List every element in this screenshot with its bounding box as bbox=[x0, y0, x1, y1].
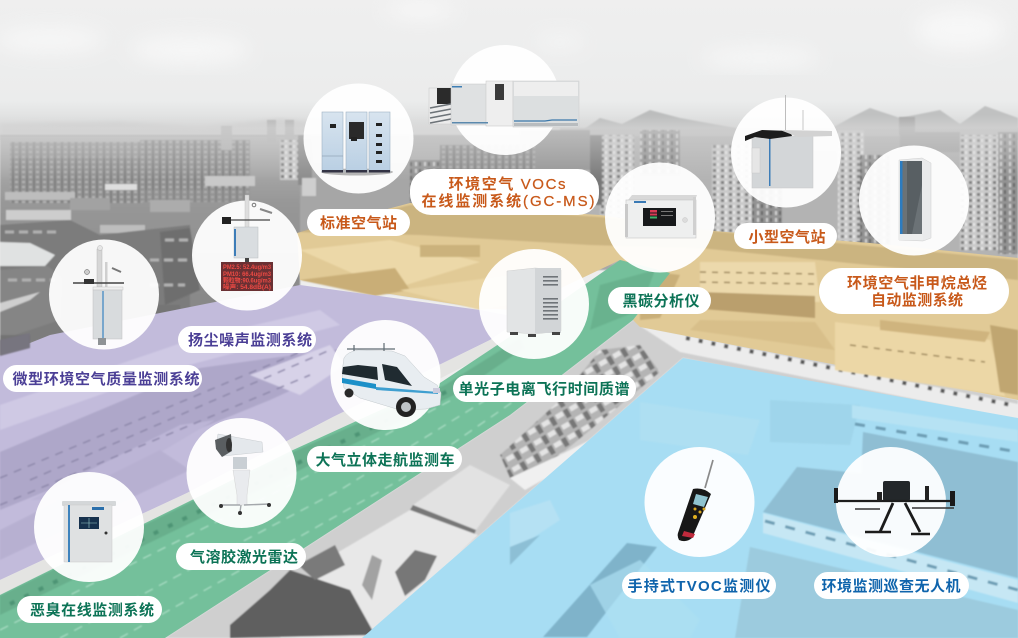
background: sky with clouds bbox=[0, 0, 1018, 140]
product: dust and noise monitor bbox=[192, 195, 302, 310]
label: single photon TOF mass spec bbox=[453, 375, 636, 402]
icon: dust monitor with display: 颗粒物:90.6ug/m3 bbox=[223, 276, 272, 284]
icon: handheld detector bbox=[678, 460, 713, 541]
label: atmospheric mobile monitoring vehicle: 大气立体走航监测车 bbox=[316, 451, 454, 469]
label: handheld TVOC monitor: 手持式TVOC监测仪 bbox=[628, 578, 770, 595]
label: micro air quality monitor: 微型环境空气质量监测系统 bbox=[12, 370, 200, 388]
right side tower rows bbox=[410, 135, 1018, 265]
product: black carbon analyzer bbox=[605, 162, 715, 272]
background: city skyline and urban blocks bbox=[0, 117, 1018, 356]
product: aerosol lidar bbox=[186, 418, 296, 528]
label: odor online monitor: 恶臭在线监测系统 bbox=[30, 601, 154, 619]
icon: small station cabinet bbox=[745, 95, 832, 188]
product: VOCs GC-MS system bbox=[429, 45, 579, 155]
label: standard air station bbox=[307, 209, 410, 236]
label: dust and noise monitor bbox=[178, 326, 316, 353]
atmospheric haze over the far skyline bbox=[0, 115, 1018, 180]
icon: GC-MS instruments bbox=[429, 81, 579, 127]
product: micro air quality monitor bbox=[49, 240, 159, 350]
label: black carbon analyzer: 黑碳分析仪 bbox=[622, 292, 700, 310]
product: standard air station bbox=[304, 84, 414, 194]
label: aerosol lidar bbox=[176, 543, 306, 570]
label: dust and noise monitor: 扬尘噪声监测系统 bbox=[188, 331, 312, 349]
icon: micro monitor station bbox=[73, 246, 124, 345]
label: VOCs GC-MS system bbox=[410, 169, 599, 215]
icon: dust monitor with display: 噪声: 54.8dB(A) bbox=[223, 283, 271, 291]
product: non-methane hydrocarbon monitor bbox=[859, 146, 969, 256]
icon: drone bbox=[834, 481, 955, 534]
label: VOCs GC-MS system: 在线监测系统(GC-MS) bbox=[422, 192, 594, 210]
label: standard air station: 标准空气站 bbox=[320, 214, 397, 232]
product: small air station bbox=[731, 95, 841, 208]
label: non-methane hydrocarbon monitor: 自动监测系统 bbox=[871, 291, 963, 309]
zone: lilac road district bbox=[0, 285, 522, 580]
icon: lidar on tripod bbox=[215, 434, 271, 515]
zone: tan industrial district bbox=[297, 203, 1018, 400]
label: handheld TVOC monitor bbox=[622, 572, 776, 599]
icon: wall-mounted odor cabinet bbox=[62, 501, 116, 562]
icon: dust monitor with display bbox=[221, 195, 273, 291]
icon: tall analyzer cabinet bbox=[899, 158, 931, 241]
label: patrol drone bbox=[814, 572, 969, 599]
label: atmospheric mobile monitoring vehicle bbox=[307, 446, 462, 472]
label: micro air quality monitor bbox=[3, 365, 202, 392]
product: odor online monitor bbox=[34, 472, 144, 582]
icon: monitoring van bbox=[342, 343, 441, 417]
icon: dust monitor with display: PM2.5: 52.4ug/m3 bbox=[223, 265, 272, 271]
label: aerosol lidar: 气溶胶激光雷达 bbox=[190, 548, 298, 566]
zone: blue factory district bbox=[362, 358, 1018, 638]
product: handheld TVOC monitor bbox=[644, 447, 754, 557]
icon: three cabinets bbox=[321, 112, 393, 176]
product: patrol drone bbox=[834, 447, 955, 557]
label: small air station bbox=[734, 223, 837, 249]
label: single photon TOF mass spec: 单光子电离飞行时间质谱 bbox=[458, 380, 630, 398]
label: patrol drone: 环境监测巡查无人机 bbox=[822, 577, 960, 595]
label: non-methane hydrocarbon monitor: 环境空气非甲烷总烃 bbox=[847, 274, 987, 292]
label: VOCs GC-MS system: 环境空气 VOCs bbox=[448, 175, 566, 193]
zone: gray ground between districts bbox=[165, 280, 1018, 638]
icon: dust monitor with display: PM10: 66.4ug/m3 bbox=[223, 272, 272, 278]
label: black carbon analyzer bbox=[608, 287, 711, 314]
product: single photon TOF mass spec bbox=[479, 249, 589, 359]
label: non-methane hydrocarbon monitor bbox=[819, 268, 1009, 314]
zone: median strip and green road bbox=[0, 260, 670, 638]
icon: rack analyzer bbox=[625, 195, 697, 238]
icon: mass spectrometer box bbox=[507, 268, 561, 337]
product: atmospheric mobile monitoring vehicle bbox=[330, 320, 441, 430]
label: small air station: 小型空气站 bbox=[748, 228, 826, 246]
label: odor online monitor bbox=[17, 596, 162, 623]
